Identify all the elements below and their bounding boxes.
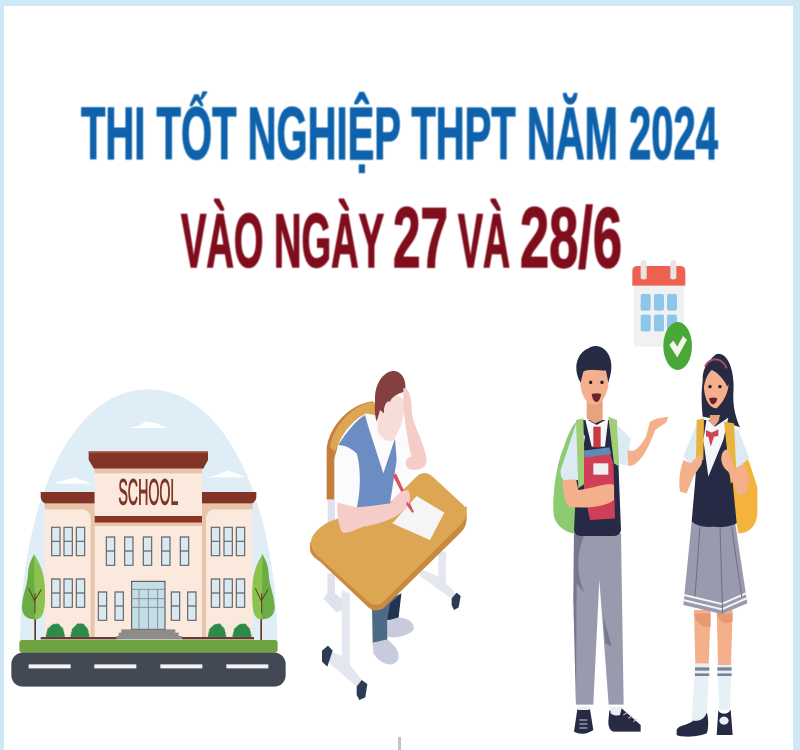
entrance door xyxy=(132,581,165,629)
chair back xyxy=(327,401,380,500)
wings xyxy=(45,503,95,638)
girl shirt collar xyxy=(703,418,728,477)
central block xyxy=(95,467,202,638)
girl legs xyxy=(694,610,733,665)
title: line 2: VÀO NGÀY xyxy=(181,199,384,284)
legs xyxy=(372,593,401,643)
boy vest xyxy=(574,420,621,536)
boy xyxy=(553,346,668,705)
trees xyxy=(22,554,275,640)
shoes xyxy=(387,617,414,637)
girl xyxy=(677,354,757,737)
paper xyxy=(392,496,444,540)
girl face xyxy=(709,415,720,427)
boy trousers xyxy=(573,533,624,705)
head xyxy=(377,395,404,441)
illustration: calendar with check mark xyxy=(632,260,692,370)
date cells xyxy=(641,294,677,331)
boy shirt xyxy=(585,418,608,447)
torso and shirt xyxy=(337,413,412,508)
calendar header xyxy=(632,266,685,286)
pencil xyxy=(393,473,414,513)
boy neck and head xyxy=(587,397,603,423)
illustration: student at desk xyxy=(310,371,467,700)
title: line 2: VÀ xyxy=(458,199,510,284)
illustration: school xyxy=(11,389,286,687)
girl shoes xyxy=(677,713,708,737)
boy backpack straps xyxy=(576,417,619,488)
calendar body xyxy=(634,283,684,347)
title: line 2: 28/6 xyxy=(520,191,622,286)
title: line 2: 27 xyxy=(393,191,448,286)
desk legs xyxy=(326,590,363,687)
vest xyxy=(338,415,397,508)
girl ribbon xyxy=(706,429,718,447)
arm on head xyxy=(403,388,427,470)
girl backpack xyxy=(693,420,707,450)
boy shoes xyxy=(574,707,641,734)
boy sleeves xyxy=(561,420,585,480)
girl straps xyxy=(696,418,737,483)
boy hair xyxy=(576,346,611,383)
girl skirt xyxy=(683,522,747,614)
girl sleeves xyxy=(683,423,703,463)
girl socks xyxy=(692,663,732,723)
boy arm extended xyxy=(627,417,668,466)
boy backpack xyxy=(553,420,580,534)
hair xyxy=(375,371,405,422)
writing arm xyxy=(337,490,410,533)
check badge xyxy=(663,322,692,370)
lawn xyxy=(19,640,278,653)
girl headband xyxy=(705,359,727,368)
steps xyxy=(117,629,182,639)
girl arms and hands xyxy=(679,455,702,493)
shrubs xyxy=(45,623,252,637)
road xyxy=(11,653,286,687)
chair legs xyxy=(323,573,345,613)
girl vest xyxy=(692,420,737,527)
illustration: school: SCHOOL xyxy=(118,472,178,513)
girl hair back xyxy=(702,354,740,427)
sky dome xyxy=(20,389,277,643)
illustration: two students xyxy=(553,346,757,737)
boy forearm and book xyxy=(584,448,615,520)
girl hair front xyxy=(703,357,730,390)
leg caps xyxy=(322,593,461,700)
desk xyxy=(310,507,467,610)
windows xyxy=(52,527,245,620)
